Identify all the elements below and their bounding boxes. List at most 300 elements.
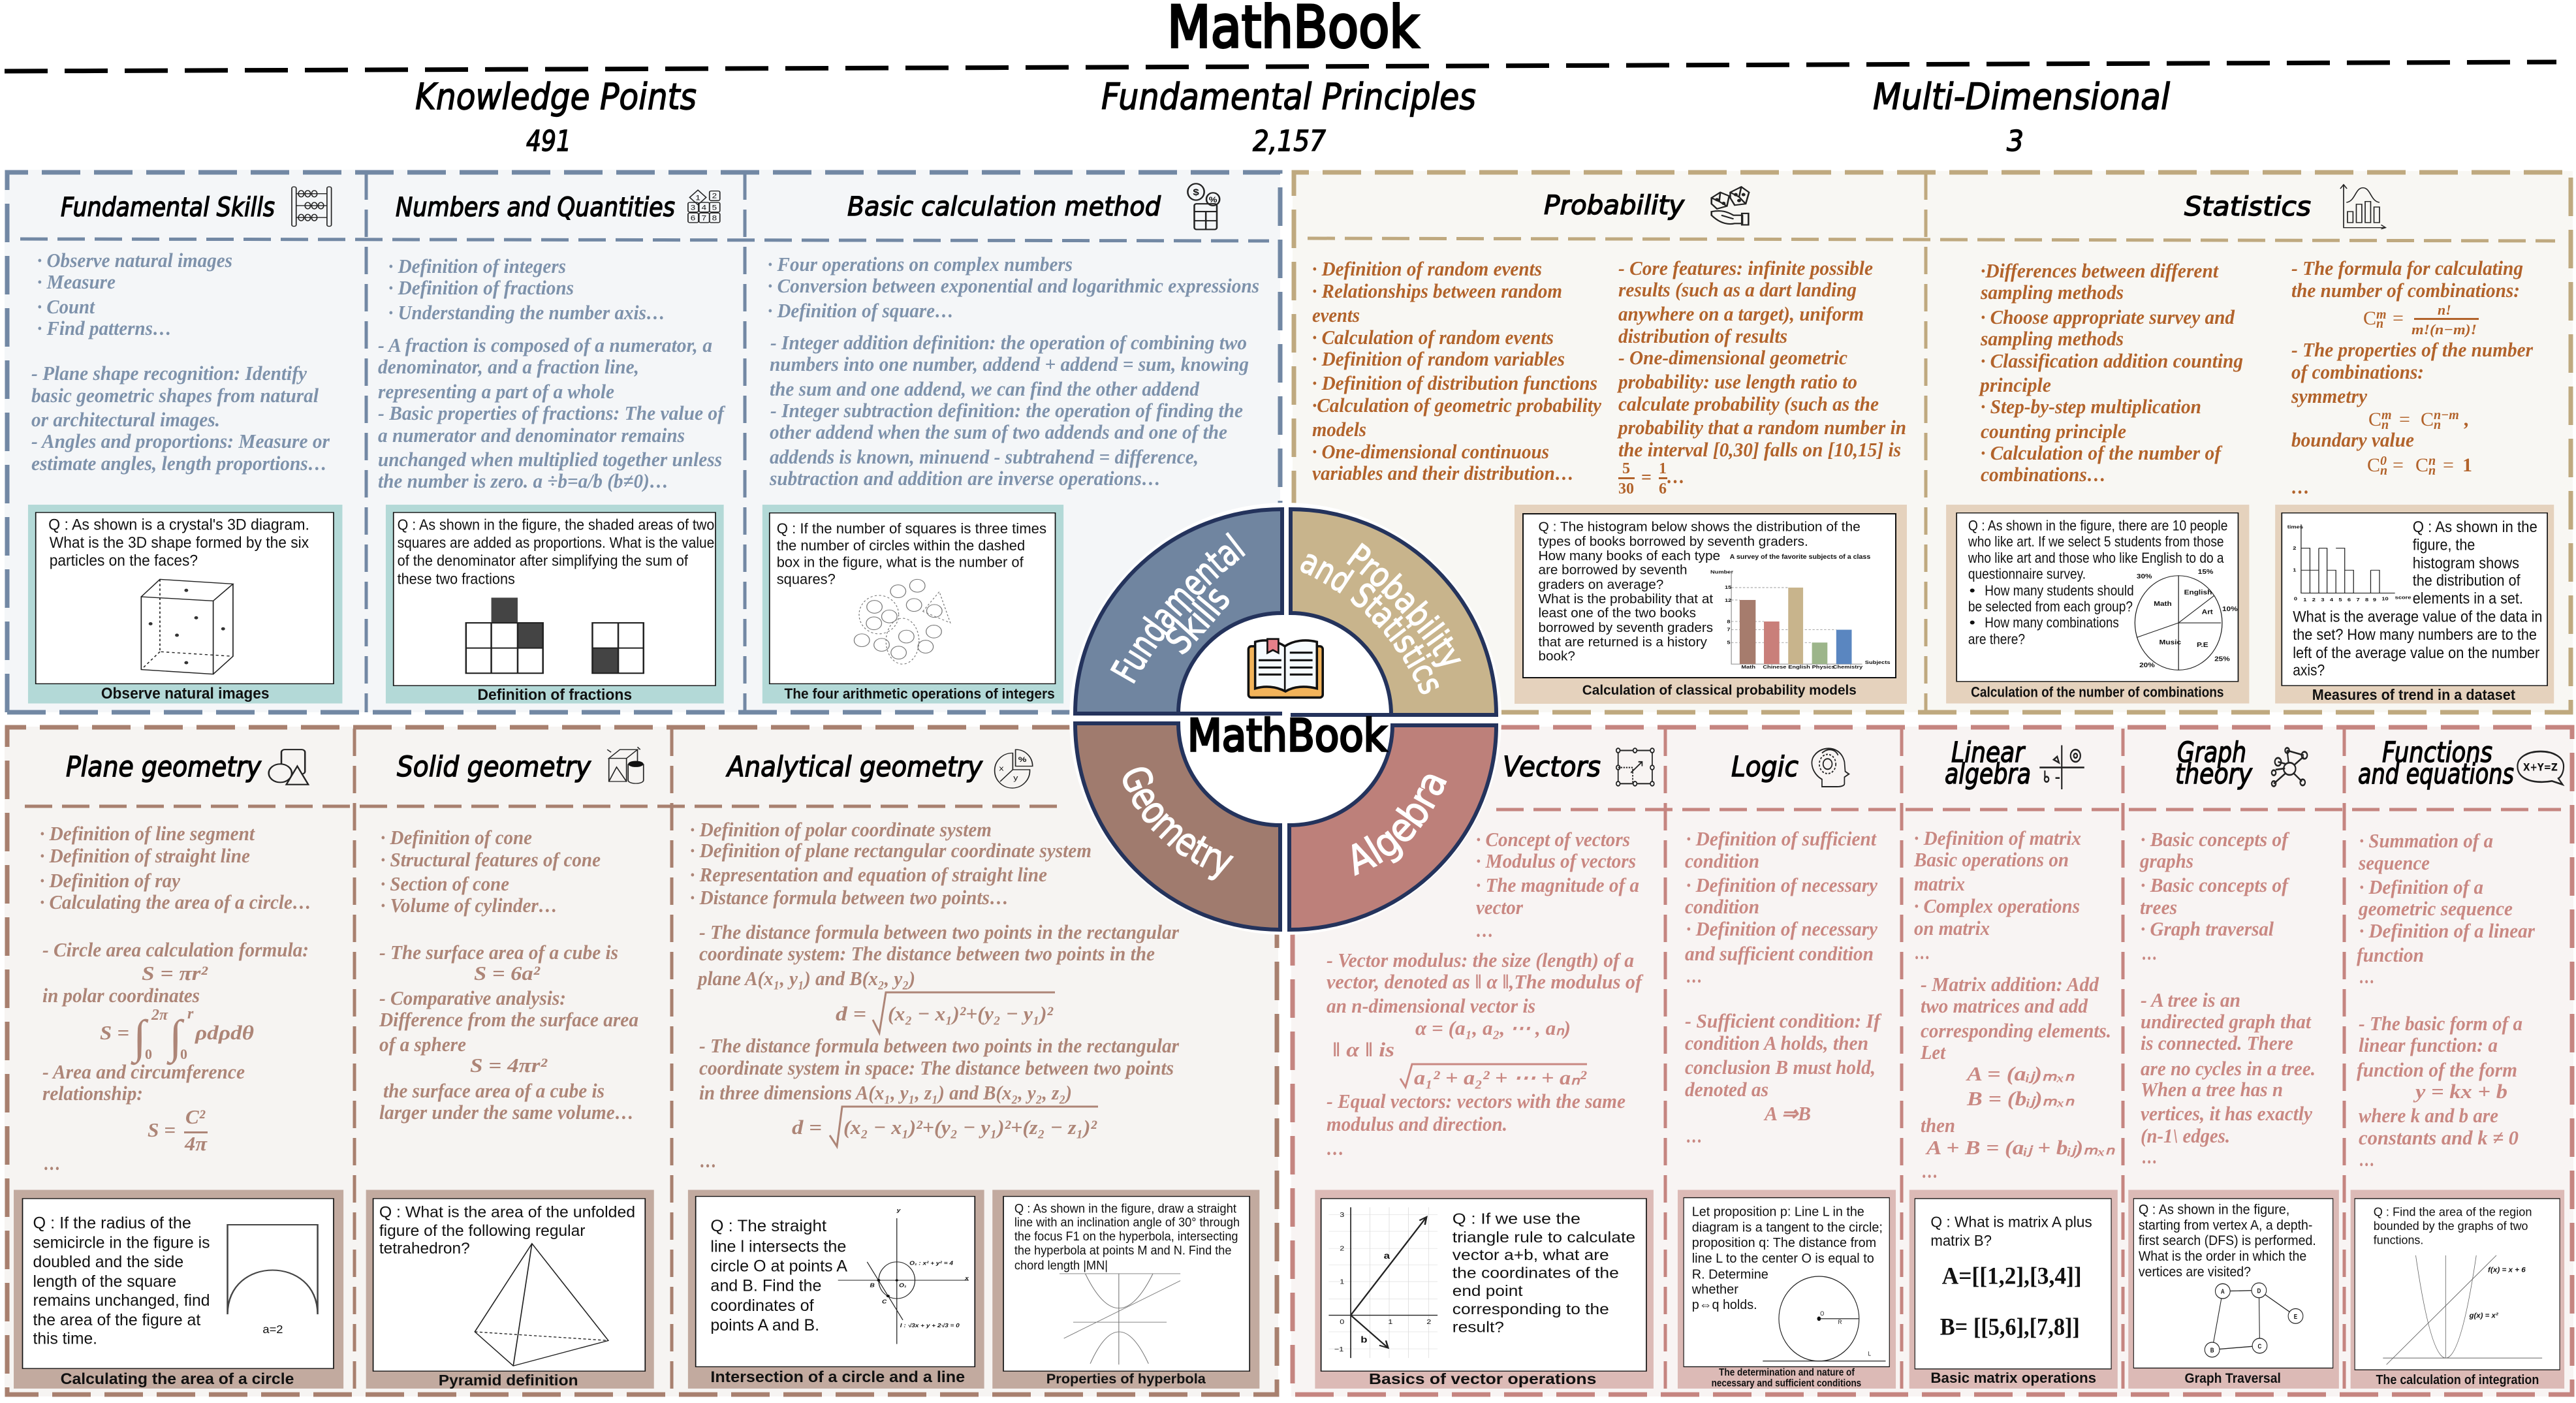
icon: chart [2340,185,2385,229]
question card: circle and line: O₁ : x² + y² = 4 [909,1261,953,1266]
question card: circle and line: C [882,1299,887,1304]
text block: concepts [1312,257,1601,484]
icon: number blocks: 8 [712,213,717,222]
wedge: Probability and Statistics [1289,507,1498,717]
text block: · Find patterns… [37,317,172,339]
question card: semicircle: this time. [33,1330,97,1348]
question card: fractions: Q : As shown in the figure, the shaded areas of two [398,517,714,533]
question card: pie chart: How many combinations [1985,615,2119,631]
heading: Fundamental Principles [1101,76,1476,158]
question card: vectors [1315,1190,1654,1389]
histogram: 3 [2321,597,2325,603]
text block: · Complex operations [1914,894,2080,917]
bar chart: favorite subjects: Chinese [1763,664,1787,670]
question card: tangent: p⇔q holds. [1692,1298,1757,1313]
text block: · Calculating the area of a circle… [40,891,311,913]
question card: vectors: vector a+b, what are [1453,1246,1609,1264]
text block: core features: 6 [1659,481,1667,497]
text block: B = (bᵢⱼ)ₘₓₙ [1966,1087,2075,1110]
text block: condition [1685,849,1759,872]
question card: vectors: Basics of vector operations [1369,1370,1596,1388]
histogram: 6 [2348,597,2351,603]
text block: formulas: = [2393,454,2404,476]
text block: C² [185,1105,206,1128]
question card: tangent: O [1820,1310,1825,1317]
text block: · Section of cone [381,872,509,895]
question card: tetrahedron: figure of the following regular [379,1222,586,1239]
pie chart: 30% [2137,573,2152,580]
heading: Vectors [1503,751,1601,783]
question card: vectors: 1 [1388,1319,1392,1326]
heading: Fundamental Principles: 2,157 [1253,125,1326,158]
text block: coordinate system: The distance between two points in the [699,942,1155,965]
text block: · Count [37,295,95,318]
text block: addends is known, minuend - subtrahend = difference, [770,445,1199,468]
question card: histogram of books: types of books borrowed by seventh graders. [1538,534,1808,549]
question card: vectors: a [1384,1252,1390,1261]
text block: - A fraction is composed of a numerator, a [378,334,712,356]
text block: on matrix [1914,917,1990,939]
panel: Linear algebra [1902,727,2123,1396]
text block: formulas: … [2291,475,2310,498]
text block: concepts: · Calculation of random events [1312,326,1554,349]
question card: vectors: Q : If we use the [1453,1210,1580,1227]
question card: histogram of books: that are returned is a history [1538,635,1708,649]
heading: Graph [2177,736,2246,769]
bar chart: favorite subjects: 15 [1725,584,1732,590]
text block: representing a part of a whole [378,380,614,403]
question card: hyperbola: Q : As shown in the figure, draw a straight [1014,1201,1236,1216]
text block: a numerator and denominator remains [378,424,685,447]
text block: core features: probability that a random number in [1616,416,1906,439]
question card: graph traversal: D [2257,1287,2261,1295]
question card: hyperbola: the focus F1 on the hyperbola, intersecting [1014,1229,1238,1244]
question card: tetrahedron [366,1190,654,1389]
question card: pie chart: Q : As shown in the figure, there are 10 people [1968,518,2227,534]
question card: histogram trend: Q : As shown in the [2413,518,2537,536]
wedge: Geometry [1073,721,1282,932]
question card: tangent: The determination and nature of [1719,1366,1855,1378]
text block: … [2142,1145,2158,1168]
question card: tangent [1678,1190,1896,1389]
text block: formulas: n [2428,454,2436,468]
question card: tangent: whether [1691,1283,1739,1297]
bar chart: favorite subjects: 12 [1725,597,1732,603]
text block: and sufficient condition [1685,942,1874,965]
icon: abacus [292,187,332,227]
heading: Knowledge Points: Knowledge Points [415,76,697,118]
icon: pie with x y [995,749,1033,788]
panel: Vectors [1291,727,1665,1396]
question card: tangent: line L to the center O is equal to [1692,1252,1874,1267]
text block [40,822,311,1174]
text block: · Summation of a [2359,829,2493,852]
question card: semicircle [14,1190,343,1389]
text block: coordinate system in space: The distance between two points [699,1056,1174,1079]
question card: vectors: corresponding to the [1453,1301,1609,1317]
text block: function of the form [2357,1058,2517,1081]
text block: methods: principle [1978,373,2051,396]
text block: core features: distribution of results [1618,324,1787,347]
icon: number blocks: 7 [702,213,706,222]
pie chart: Music [2160,639,2181,646]
bar chart: favorite subjects: Number [1710,569,1734,575]
question card: graph traversal: Q : As shown in the figure, [2139,1202,2289,1218]
icon: network [2272,748,2307,786]
panel: Graph theory [2123,727,2344,1396]
text block: - A tree is an [2141,988,2240,1011]
question card: circle and line: Intersection of a circle and a line [710,1368,965,1385]
text block: formulas: n [2376,317,2383,331]
text block: - The surface area of a cube is [379,941,618,964]
question card: semicircle: semicircle in the figure is [33,1233,210,1252]
question card: vectors: 2 [1340,1246,1344,1252]
text block: the surface area of a cube is [383,1079,605,1102]
text block: methods: sampling methods [1980,327,2124,350]
text block: ∫ [131,1011,149,1065]
heading [2175,736,2252,791]
text block: methods: counting principle [1981,420,2126,443]
question card: matrix: Basic matrix operations [1930,1370,2096,1387]
question card: semicircle: the area of the figure at [33,1311,200,1329]
question card: fractions: of the denominator after simplifying the sum of [398,552,689,569]
question card: integration: functions. [2374,1233,2423,1247]
bar chart: favorite subjects: 8 [1727,619,1731,625]
question card: pie chart: How many students should [1985,583,2134,599]
bar chart: favorite subjects: Math [1741,664,1755,670]
icon: calculator: $ [1193,187,1199,197]
panel: Basic calculation method [745,170,1280,712]
bar chart: favorite subjects [1710,553,1891,670]
text block: estimate angles, length proportions… [31,452,327,475]
question card: pie chart: • [1970,615,1975,631]
text block [378,255,726,492]
text block: S = [148,1118,176,1141]
wedge: Probability and Statistics: and Statistics [1300,554,1439,695]
text block: formulas: symmetry [2291,385,2367,407]
question card: integration: f(x) = x + 6 [2488,1266,2526,1274]
text block: methods: · Step-by-step multiplication [1981,395,2201,418]
text block: formulas: m [2376,307,2387,322]
text block: 0 [145,1046,152,1062]
text block: vector [1476,896,1524,919]
text block: formulas: = [2443,454,2454,476]
question card: graph traversal [2128,1190,2339,1389]
text block: formulas: n−m [2434,408,2459,422]
question card: matrix [1909,1190,2118,1389]
question card: fractions [386,505,724,704]
question card: tetrahedron: tetrahedron? [379,1239,470,1257]
text block: · Definition of fractions [388,276,574,299]
question card: squares and circles: Q : If the number of squares is three times [777,521,1046,537]
icon: shapes [269,749,308,785]
question card: circle and line: points A and B. [710,1316,819,1334]
question card: histogram of books: are borrowed by seventh [1538,563,1688,577]
question card: histogram trend: figure, the [2413,536,2475,554]
text block: d = [836,1002,866,1025]
bar chart: favorite subjects: 5 [1727,639,1731,645]
question card: circle and line [688,1190,984,1389]
heading: Solid geometry [397,751,591,783]
question card: vectors: result? [1453,1318,1504,1336]
question card: crystal [28,505,342,704]
text block: core features: calculate probability (such as the [1618,392,1879,415]
question card: hyperbola: Properties of hyperbola [1046,1371,1206,1387]
text block: methods: · Choose appropriate survey and [1981,306,2235,328]
text block: formulas: n [2428,464,2436,478]
question card: fractions: squares are added as proportions. What is the value [398,535,714,551]
text block: an n-dimensional vector is [1327,994,1535,1017]
heading: Plane geometry [66,751,261,783]
question card: semicircle: doubled and the side [33,1253,183,1270]
text block: r [187,1005,194,1022]
icon: number blocks: 5 [712,203,717,212]
histogram: 5 [2338,597,2342,603]
text block: concepts: · Relationships between random [1312,279,1562,302]
text block: constants and k ≠ 0 [2359,1126,2519,1149]
text block: - Integer addition definition: the operation of combining two [770,331,1247,354]
histogram: score [2395,594,2411,600]
heading: Analytical geometry [725,751,982,783]
panel: Statistics [1926,171,2573,712]
text block [1685,827,1882,1147]
text block: formulas [2291,257,2534,498]
text block: (x₂ − x₁)²+(y₂ − y₁)² [888,1002,1054,1025]
text block: concepts: models [1312,418,1366,441]
histogram: 2 [2293,545,2297,551]
text block: · Definition of plane rectangular coordinate system [690,839,1092,862]
question card: semicircle: a=2 [262,1323,283,1336]
question card: pie chart: questionnaire survey. [1968,567,2086,582]
text block: (x₂ − x₁)²+(y₂ − y₁)²+(z₂ − z₁)² [843,1116,1097,1139]
question card: pie chart: who like art. If we select 5 students from those [1968,534,2224,550]
text block: … [700,1149,717,1172]
question card: graph traversal: vertices are visited? [2139,1264,2251,1280]
question card: histogram trend: elements in a set. [2413,590,2523,607]
text block: · Basic concepts of [2141,828,2290,851]
bar chart: favorite subjects: English [1788,664,1810,670]
text block: trees [2140,896,2177,919]
panel: Probability [1293,171,1926,712]
text block: denominator, and a fraction line, [378,355,639,378]
question card: circle and line: y [896,1208,901,1213]
text block: in three dimensions A(x₁, y₁, z₁) and B(x₂, y₂, z₂) [699,1081,1072,1104]
text block: core features: probability: use length ratio to [1616,370,1857,393]
question card: tangent: diagram is a tangent to the circle; [1692,1221,1883,1235]
text block: formulas: - The properties of the number [2291,338,2534,361]
heading: Functions [2382,736,2492,769]
heading: Multi-Dimensional: 3 [2007,125,2024,158]
text block: … [2142,941,2158,964]
text block: - Integer subtraction definition: the operation of finding the [770,399,1243,422]
text block: concepts: · Definition of distribution functions [1312,371,1597,394]
icon: head with gear [1812,748,1849,787]
text block: - Basic properties of fractions: The value of [378,402,726,424]
text block: - Angles and proportions: Measure or [31,430,330,452]
question card: vectors: triangle rule to calculate [1453,1229,1635,1246]
icon: solids [607,747,644,783]
text block: unchanged when multiplied together unless [378,448,722,471]
question card: matrix: B= [[5,6],[7,8]] [1940,1313,2080,1340]
question card: circle and line: l : √3x + y + 2√3 = 0 [900,1323,960,1329]
question card: tetrahedron: Q : What is the area of the unfolded [379,1203,635,1221]
text block: function [2357,943,2424,966]
text block: larger under the same volume… [379,1101,634,1124]
icon: number blocks: 2 [712,192,717,200]
histogram: 1 [2303,597,2307,603]
icon: vector box [1616,748,1654,786]
question card: integration: bounded by the graphs of two [2374,1220,2528,1233]
histogram: 10 [2381,595,2389,601]
pie chart: 15% [2198,569,2214,576]
text block: · Volume of cylinder… [381,894,558,917]
text block: y = kx + b [2413,1080,2507,1103]
text block: formulas: C [2363,307,2376,329]
text block: core features: the interval [0,30] falls on [10,15] is [1618,438,1901,461]
question card: pie chart: Calculation of the number of combinations [1971,685,2224,701]
text block: … [1476,919,1494,941]
bar chart: favorite subjects: Chemistry [1833,664,1862,670]
text block: S = 6a² [474,962,541,985]
text block: concepts: events [1312,304,1360,326]
question card: vectors: 0 [1340,1319,1344,1326]
text block: A + B = (aᵢⱼ + bᵢⱼ)ₘₓₙ [1925,1136,2116,1159]
text block: core features: = [1641,467,1652,488]
question card: hyperbola [992,1190,1259,1389]
text block: … [2359,1148,2375,1171]
bar chart: favorite subjects: Subjects [1865,659,1891,665]
icon: number blocks [688,190,720,223]
question card: matrix: matrix B? [1930,1232,1992,1250]
text block: · Basic concepts of [2141,874,2290,896]
question card: tangent: R [1838,1318,1842,1325]
question card: tangent: proposition q: The distance from [1692,1236,1876,1251]
question card: vectors: 2 [1426,1319,1431,1326]
question card: histogram of books: borrowed by seventh graders [1538,620,1713,635]
question card: semicircle: Q : If the radius of the [33,1214,191,1232]
heading: Numbers and Quantities [396,193,675,223]
panel: Functions and equations [2344,727,2573,1396]
icon: pie with x y: % [1018,755,1027,764]
central wheel [1069,503,1501,935]
panel: Fundamental Skills [5,170,366,712]
text block: … [1686,964,1703,987]
pie chart: 10% [2222,606,2238,613]
text block: core features: results (such as a dart landing [1618,278,1857,301]
text block: S = 4πr² [470,1054,548,1077]
text block: · Graph traversal [2141,917,2274,940]
icon: number blocks: 6 [691,213,695,222]
heading [2358,736,2514,791]
text block: · Representation and equation of straight line [690,863,1047,886]
text block: · Distance formula between two points… [690,886,1009,909]
question card: matrix: A=[[1,2],[3,4]] [1942,1262,2082,1289]
heading: Fundamental Skills [61,193,275,223]
question card: histogram of books [1515,505,1907,704]
text block: d = [792,1116,822,1139]
text block: (n-1\ edges. [2141,1124,2230,1147]
icon: calculator: % [1209,195,1217,204]
text block: … [44,1152,61,1174]
text block: · Concept of vectors [1476,828,1630,851]
text block: formulas: = [2393,307,2404,329]
histogram: times [2287,524,2303,529]
question card: graph traversal: C [2258,1343,2262,1350]
question card: integration: The calculation of integration [2376,1372,2539,1387]
text block: A ⇒B [1763,1102,1811,1125]
icon: pie with x y: y [1013,773,1018,782]
question card: pie chart: are there? [1968,631,2025,648]
text block: · Four operations on complex numbers [768,253,1073,276]
question card: circle and line: Q : The straight [710,1217,826,1235]
text block: - Area and circumference [42,1060,245,1083]
text block: · Definition of square… [768,299,954,322]
text block: methods: combinations… [1981,463,2106,486]
text block: core features: anywhere on a target), uniform [1618,302,1864,325]
text block: 0 [180,1046,187,1062]
question card: matrix: Q : What is matrix A plus [1930,1213,2092,1231]
text block [768,253,1259,490]
text block: - Sufficient condition: If [1685,1009,1882,1032]
text block: … [2359,965,2375,988]
question card: circle and line: O₁ [899,1283,907,1288]
text block: · Definition of necessary [1686,917,1877,940]
question card: fractions: these two fractions [398,571,515,588]
text block: linear function: a [2359,1033,2498,1056]
text block: 2π [151,1007,168,1024]
text block: formulas: of combinations: [2291,360,2424,383]
question card: semicircle: remains unchanged, find [33,1291,210,1309]
text block: in polar coordinates [42,984,200,1007]
text block: formulas: 1 [2462,454,2472,476]
question card: crystal: What is the 3D shape formed by the six [50,533,309,551]
text block: formulas: n [2380,464,2387,478]
question card: crystal: Observe natural images [101,684,269,702]
question card: circle and line: line l intersects the [710,1238,846,1256]
heading: Probability [1544,191,1685,221]
text block: two matrices and add [1921,994,2088,1017]
question card: vectors: b [1360,1335,1368,1345]
text block: where k and b are [2359,1104,2498,1127]
text block [1913,827,2116,1182]
wedge: Algebra: Algebra [1352,774,1447,876]
text block: - Equal vectors: vectors with the same [1327,1090,1626,1112]
text block: · Conversion between exponential and logarithmic expressions [768,274,1259,297]
text block: α = (a₁, a₂, ⋯ , aₙ) [1415,1017,1571,1039]
question card: squares and circles: squares? [777,571,836,588]
text block: concepts: ·Calculation of geometric probability [1312,394,1601,417]
text block: or architectural images. [31,408,220,431]
question card: squares and circles: box in the figure, what is the number of [777,554,1024,571]
text block: ∫ [166,1011,185,1065]
text block: S = πr² [142,962,208,985]
text block: core features [1616,257,1906,497]
text block: then [1921,1114,1955,1137]
bar chart: favorite subjects: 7 [1727,626,1731,632]
heading: Multi-Dimensional [1873,76,2171,158]
text block: - The basic form of a [2359,1012,2522,1035]
histogram: 7 [2356,597,2360,603]
text block: formulas: C [2367,454,2380,476]
icon: axes [2039,745,2084,789]
question card: integration: g(x) = x² [2468,1312,2498,1320]
text block: of a sphere [379,1033,466,1056]
text block: 4π [184,1132,208,1155]
histogram: 0 [2294,595,2297,601]
text block: · Definition of a [2359,875,2483,898]
text block: methods: sampling methods [1980,281,2124,304]
text block [379,826,638,1124]
